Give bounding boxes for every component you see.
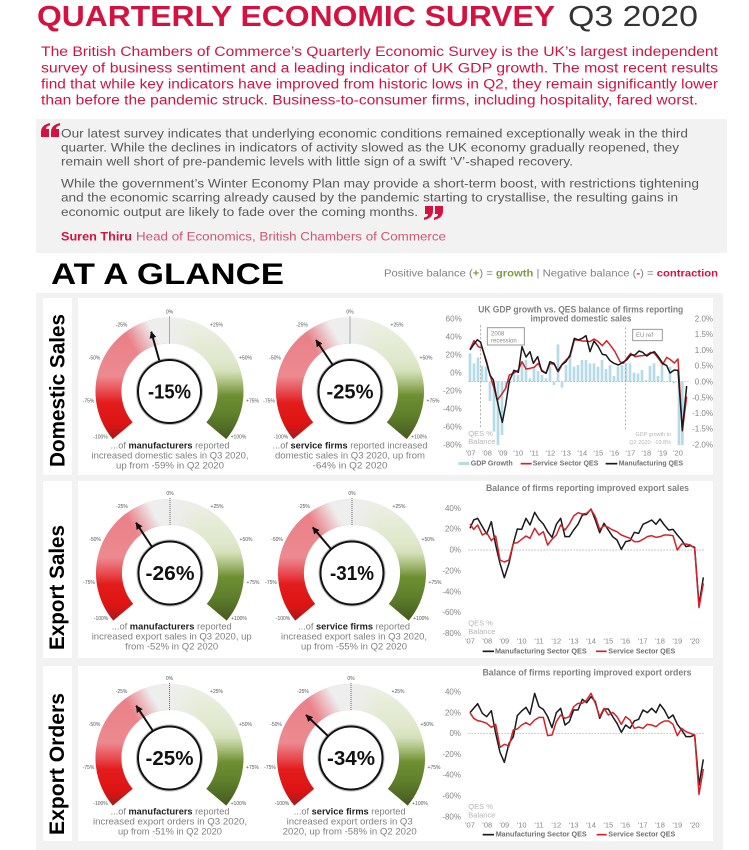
chart: GDP growth vs QES domestic sales: GDP growth in <box>635 432 671 438</box>
caption: manufacturers domestic sales: up from -59% in Q2 2020 <box>116 460 224 471</box>
section label: export orders: Export Orders <box>45 693 69 835</box>
gauge: service firms export orders: +25% <box>392 689 405 695</box>
chart: export sales balance: 20% <box>445 525 461 534</box>
chart: export orders balance: '08 <box>482 820 492 829</box>
chart: GDP growth vs QES domestic sales: '19 <box>657 449 667 458</box>
gauge: service firms export orders: -100% <box>275 801 290 807</box>
gauge: service firms export orders: 0% <box>347 676 355 682</box>
chart: export orders balance <box>442 668 705 839</box>
gauge: manufacturers domestic sales: +75% <box>246 398 260 404</box>
chart: GDP growth vs QES domestic sales: 20% <box>446 350 462 359</box>
gauge: manufacturers domestic sales: +50% <box>239 356 253 362</box>
panel: export orders <box>43 666 713 841</box>
chart: export orders balance: '19 <box>672 820 682 829</box>
caption: manufacturers export sales: from -52% in Q2 2020 <box>125 641 218 652</box>
chart: export sales balance <box>442 483 705 655</box>
chart: export sales balance: '07 <box>465 637 475 646</box>
caption: manufacturers domestic sales: ...of manufacturers reported <box>110 440 229 451</box>
caption: service firms export orders: ...of service firms reported <box>294 806 406 817</box>
chart: GDP growth vs QES domestic sales: '13 <box>561 449 571 458</box>
quote text: remain well short of pre-pandemic levels with little sign of a swift ‘V’-shaped recovery. <box>61 155 573 169</box>
caption: manufacturers export orders: increased export orders in Q3 2020, <box>93 816 247 827</box>
caption: service firms domestic sales: -64% in Q2 2020 <box>312 460 388 471</box>
chart: export orders balance: -80% <box>442 812 461 821</box>
icon: opening quote mark <box>41 123 60 137</box>
chart: export orders balance: 20% <box>445 708 461 717</box>
gauge: service firms export orders: +50% <box>421 722 434 728</box>
chart: export sales balance: '20 <box>690 637 700 646</box>
caption: manufacturers export orders: up from -51% in Q2 2020 <box>118 826 222 837</box>
balance legend: Positive balance ( +) = growth | Negative balance ( -) = contraction <box>384 269 718 280</box>
gauge: service firms export sales: -50% <box>271 537 283 543</box>
gauge: service firms export orders: -50% <box>270 722 282 728</box>
chart: GDP growth vs QES domestic sales: recession <box>491 338 517 344</box>
chart: export sales balance: '08 <box>482 637 492 646</box>
chart: GDP growth vs QES domestic sales: '07 <box>466 449 476 458</box>
caption: service firms domestic sales <box>272 440 428 471</box>
gauge: service firms domestic sales: 0% <box>346 310 354 316</box>
chart: export sales balance: '19 <box>672 637 682 646</box>
chart: export orders balance: QES % <box>468 802 493 811</box>
chart: export sales balance: -60% <box>442 608 461 617</box>
chart: GDP growth vs QES domestic sales: -2.0% <box>692 441 713 450</box>
gauge: service firms export orders <box>264 676 441 807</box>
quote text: quarter. While the declines in indicators of activity slowed as the UK economy gradually reopened, they <box>61 141 680 155</box>
chart: export orders balance: '12 <box>551 820 561 829</box>
gauge: service firms export sales: +25% <box>393 504 406 510</box>
chart: GDP growth vs QES domestic sales: '12 <box>545 449 555 458</box>
title: QUARTERLY ECONOMIC SURVEY <box>37 1 555 33</box>
gauge: service firms domestic sales: -25% <box>296 322 308 328</box>
gauge: service firms export sales: -100% <box>276 616 291 622</box>
chart: export sales balance: '12 <box>551 637 561 646</box>
caption: service firms export sales: increased export sales in Q3 2020, <box>281 631 427 642</box>
gauge: manufacturers export sales: +100% <box>231 616 247 622</box>
chart: export orders balance: '20 <box>690 820 700 829</box>
chart: GDP growth vs QES domestic sales: GDP Growth <box>471 459 513 468</box>
chart: GDP growth vs QES domestic sales: Manufacturing QES <box>619 459 683 468</box>
gauge: service firms export orders: +75% <box>428 765 441 771</box>
gauge: service firms export orders: -75% <box>264 765 276 771</box>
chart: GDP growth vs QES domestic sales: -1.5% <box>692 425 713 434</box>
chart: export sales balance: -20% <box>442 566 461 575</box>
gauge: manufacturers export sales: +75% <box>247 580 260 586</box>
chart: GDP growth vs QES domestic sales: 1.5% <box>695 330 713 339</box>
chart: GDP growth vs QES domestic sales: '14 <box>577 449 587 458</box>
chart: export orders balance: 0% <box>449 729 461 738</box>
intro paragraph: survey of business sentiment and a leading indicator of UK GDP growth. The most recent results <box>41 60 718 76</box>
quote attribution: Head of Economics, British Chambers of Commerce <box>136 230 446 244</box>
gauge: manufacturers export sales: -26% <box>146 563 195 585</box>
gauge: manufacturers export sales: 0% <box>166 491 174 497</box>
caption: manufacturers export sales <box>92 621 252 652</box>
chart: export orders balance: '14 <box>586 820 596 829</box>
gauge: manufacturers export orders: +50% <box>239 722 253 728</box>
chart: export orders balance: '09 <box>499 820 509 829</box>
chart: GDP growth vs QES domestic sales: QES % <box>468 429 493 438</box>
gauge: service firms domestic sales: -25% <box>327 382 374 404</box>
caption: manufacturers export sales: ...of manufacturers reported <box>112 621 232 632</box>
gauge: manufacturers export orders: -25% <box>146 748 194 770</box>
chart: export sales balance: Service Sector QES <box>608 646 675 655</box>
gauge: service firms export sales: -75% <box>265 580 277 586</box>
chart: export sales balance: Balance of firms reporting improved export sales <box>486 483 689 493</box>
chart: export sales balance: '11 <box>534 637 544 646</box>
quote text: Our latest survey indicates that underlying economic conditions remained exceptionally weak in the third <box>61 126 688 140</box>
chart: export sales balance: '18 <box>655 637 665 646</box>
caption: service firms export orders <box>283 806 417 837</box>
panel: export sales <box>43 481 713 658</box>
gauge: manufacturers export orders: +25% <box>210 689 224 695</box>
gauge: manufacturers export orders: -100% <box>93 801 108 807</box>
chart: export sales balance: '09 <box>499 637 509 646</box>
gauge: service firms export orders: -25% <box>297 689 309 695</box>
chart: GDP growth vs QES domestic sales: 40% <box>446 332 462 341</box>
gauge: manufacturers export orders <box>83 676 260 807</box>
caption: service firms export orders: 2020, up from -58% in Q2 2020 <box>283 826 417 837</box>
panel: dashboard background <box>36 293 723 850</box>
gauge: service firms export sales: -25% <box>298 504 310 510</box>
chart: export orders balance: Balance <box>468 810 495 820</box>
chart: GDP growth vs QES domestic sales: 0% <box>450 368 462 377</box>
gauge: service firms domestic sales: -100% <box>274 434 289 440</box>
chart: export orders balance: -40% <box>442 771 461 780</box>
chart: GDP growth vs QES domestic sales: -1.0% <box>692 409 713 418</box>
gauge: manufacturers export orders: -25% <box>116 689 128 695</box>
gauge: manufacturers export sales: -50% <box>89 537 101 543</box>
chart: GDP growth vs QES domestic sales: improved domestic sales <box>530 314 632 324</box>
chart: GDP growth vs QES domestic sales: '17 <box>625 449 635 458</box>
chart: export orders balance: '18 <box>655 820 665 829</box>
chart: export sales balance: '10 <box>517 637 527 646</box>
chart: export orders balance: '15 <box>603 820 613 829</box>
quote text <box>61 126 699 219</box>
chart: GDP growth vs QES domestic sales: -80% <box>443 440 462 449</box>
gauge: manufacturers domestic sales: +100% <box>231 434 247 440</box>
gauge: manufacturers export sales: -100% <box>94 616 109 622</box>
gauge: manufacturers domestic sales <box>83 310 260 440</box>
caption: service firms domestic sales: domestic sales in Q3 2020, up from <box>275 450 425 461</box>
gauge: service firms export sales: 0% <box>348 491 356 497</box>
chart: export sales balance: -40% <box>442 587 461 596</box>
gauge: service firms domestic sales: +100% <box>411 434 427 440</box>
caption: manufacturers domestic sales: increased domestic sales in Q3 2020, <box>92 450 248 461</box>
caption: manufacturers export orders: ...of manufacturers reported <box>110 806 229 817</box>
chart: GDP growth vs QES domestic sales: 0.5% <box>695 362 713 371</box>
title: Q3 2020 <box>568 1 698 33</box>
chart: export sales balance: '15 <box>603 637 613 646</box>
intro paragraph: The British Chambers of Commerce’s Quarterly Economic Survey is the UK’s largest independent <box>41 44 718 59</box>
gauge: service firms export sales: +75% <box>429 580 442 586</box>
intro paragraph: than before the pandemic struck. Business-to-consumer firms, including hospitality, fared worst. <box>41 92 698 108</box>
gauge: manufacturers export sales: +50% <box>240 537 253 543</box>
chart: export sales balance: '17 <box>638 637 648 646</box>
gauge: service firms export sales: +100% <box>413 616 429 622</box>
chart: export orders balance: 40% <box>445 687 461 696</box>
section label: export sales: Export Sales <box>45 525 69 650</box>
gauge: manufacturers export orders: +75% <box>246 765 260 771</box>
chart: GDP growth vs QES domestic sales: Balance <box>468 437 495 446</box>
chart: export orders balance: '16 <box>620 820 630 829</box>
chart: export sales balance: -80% <box>442 629 461 638</box>
chart: GDP growth vs QES domestic sales: Q2 2020: -19.8% <box>629 440 671 446</box>
chart: GDP growth vs QES domestic sales: '09 <box>498 449 508 458</box>
chart: export orders balance: '11 <box>534 820 544 829</box>
gauge: service firms export orders: -34% <box>327 748 375 770</box>
chart: export orders balance: '10 <box>517 820 527 829</box>
chart: export orders balance: '13 <box>569 820 579 829</box>
gauge: manufacturers domestic sales: -50% <box>89 356 101 362</box>
chart: GDP growth vs QES domestic sales: -20% <box>443 386 462 395</box>
gauge: manufacturers export orders: -50% <box>89 722 101 728</box>
caption: service firms export sales: ...of service firms reported <box>298 621 410 632</box>
gauge: manufacturers domestic sales: -25% <box>116 322 128 328</box>
quote text: economic output are likely to fade over the coming months. <box>61 205 418 219</box>
gauge: manufacturers domestic sales: -100% <box>93 434 108 440</box>
panel: domestic sales <box>43 298 713 475</box>
chart: export orders balance: Balance of firms reporting improved export orders <box>482 668 692 678</box>
chart: GDP growth vs QES domestic sales: '18 <box>641 449 651 458</box>
gauge: manufacturers export sales: -25% <box>116 504 128 510</box>
caption: manufacturers domestic sales <box>92 440 248 471</box>
caption: manufacturers export orders <box>93 806 247 837</box>
chart: export sales balance: 40% <box>445 504 461 513</box>
gauge: service firms export sales: +50% <box>422 537 435 543</box>
gauge: service firms domestic sales: +25% <box>391 322 404 328</box>
gauge: manufacturers domestic sales: -15% <box>148 382 191 404</box>
chart: GDP growth vs QES domestic sales <box>443 304 713 468</box>
intro paragraph: find that while key indicators have improved from historic lows in Q2, they remain significantly lower <box>41 76 719 92</box>
gauge: service firms domestic sales: -75% <box>263 398 275 404</box>
gauge: manufacturers export orders: -75% <box>83 765 95 771</box>
chart: GDP growth vs QES domestic sales: '10 <box>513 449 523 458</box>
gauge: manufacturers export orders: +100% <box>231 801 247 807</box>
gauge: manufacturers export sales: -75% <box>83 580 95 586</box>
panel: quote <box>36 119 727 253</box>
gauge: service firms export sales: -31% <box>330 563 374 585</box>
caption: service firms export sales <box>281 621 427 652</box>
quote attribution: Suren Thiru <box>61 230 132 244</box>
chart: GDP growth vs QES domestic sales: UK GDP growth vs. QES balance of firms reporting <box>478 304 683 314</box>
chart: GDP growth vs QES domestic sales: 0.0% <box>695 377 713 386</box>
chart: GDP growth vs QES domestic sales: 1.0% <box>695 346 713 355</box>
chart: GDP growth vs QES domestic sales: -40% <box>443 404 462 413</box>
chart: export orders balance: '07 <box>465 820 475 829</box>
chart: GDP growth vs QES domestic sales: -0.5% <box>692 393 713 402</box>
chart: export orders balance: -20% <box>442 750 461 759</box>
gauge: manufacturers domestic sales: +25% <box>210 322 224 328</box>
icon: closing quote mark <box>424 206 443 220</box>
gauge: manufacturers domestic sales: 0% <box>166 310 174 316</box>
chart: export orders balance: '17 <box>638 820 648 829</box>
chart: export sales balance: Manufacturing Sector QES <box>495 646 587 655</box>
gauge: manufacturers domestic sales: -75% <box>83 398 95 404</box>
chart: export orders balance: Manufacturing Sector QES <box>496 830 587 839</box>
gauge: service firms domestic sales: +50% <box>420 356 433 362</box>
chart: export orders balance: -60% <box>442 791 461 800</box>
caption: service firms export sales: up from -55% in Q2 2020 <box>301 641 407 652</box>
quote text: and the economic scarring already caused by the pandemic starting to crystallise, the resulting gains in <box>61 191 678 205</box>
quote text: While the government’s Winter Economy Plan may provide a short-term boost, with restrictions tightening <box>61 176 699 190</box>
gauge: service firms export orders: +100% <box>412 801 428 807</box>
chart: GDP growth vs QES domestic sales: '08 <box>482 449 492 458</box>
section label: domestic sales: Domestic Sales <box>46 314 70 467</box>
chart: export sales balance: Balance <box>468 627 495 636</box>
gauge: service firms domestic sales <box>263 310 440 440</box>
chart: export sales balance: 0% <box>449 546 461 555</box>
gauge: manufacturers export orders: 0% <box>166 676 174 682</box>
chart: GDP growth vs QES domestic sales: '11 <box>530 449 539 458</box>
chart: GDP growth vs QES domestic sales: '16 <box>609 449 619 458</box>
gauge: service firms domestic sales: +75% <box>427 398 440 404</box>
heading: at a glance: AT A GLANCE <box>51 258 284 291</box>
chart: GDP growth vs QES domestic sales: Service Sector QES <box>533 459 598 468</box>
gauge: manufacturers export sales: +25% <box>211 504 224 510</box>
chart: export orders balance: Service Sector QES <box>608 830 675 839</box>
caption: service firms domestic sales: ...of service firms reported increased <box>272 440 428 451</box>
chart: export sales balance: '16 <box>620 637 630 646</box>
gauge: service firms domestic sales: -50% <box>269 356 281 362</box>
intro paragraph <box>41 44 719 108</box>
chart: GDP growth vs QES domestic sales: 60% <box>446 315 462 324</box>
chart: GDP growth vs QES domestic sales: 2008 <box>491 332 505 338</box>
caption: manufacturers export sales: increased export sales in Q3 2020, up <box>92 631 252 642</box>
chart: GDP growth vs QES domestic sales: -60% <box>443 422 462 431</box>
chart: GDP growth vs QES domestic sales: '15 <box>593 449 603 458</box>
chart: GDP growth vs QES domestic sales: '20 <box>673 449 683 458</box>
caption: service firms export orders: increased export orders in Q3 <box>287 816 413 827</box>
gauge: service firms export sales <box>265 491 442 622</box>
chart: GDP growth vs QES domestic sales: 2.0% <box>695 315 713 324</box>
chart: export sales balance: '14 <box>586 637 596 646</box>
gauge: manufacturers export sales <box>83 491 260 622</box>
chart: GDP growth vs QES domestic sales: EU ref <box>636 333 653 339</box>
chart: export sales balance: QES % <box>468 619 493 628</box>
chart: export sales balance: '13 <box>569 637 579 646</box>
